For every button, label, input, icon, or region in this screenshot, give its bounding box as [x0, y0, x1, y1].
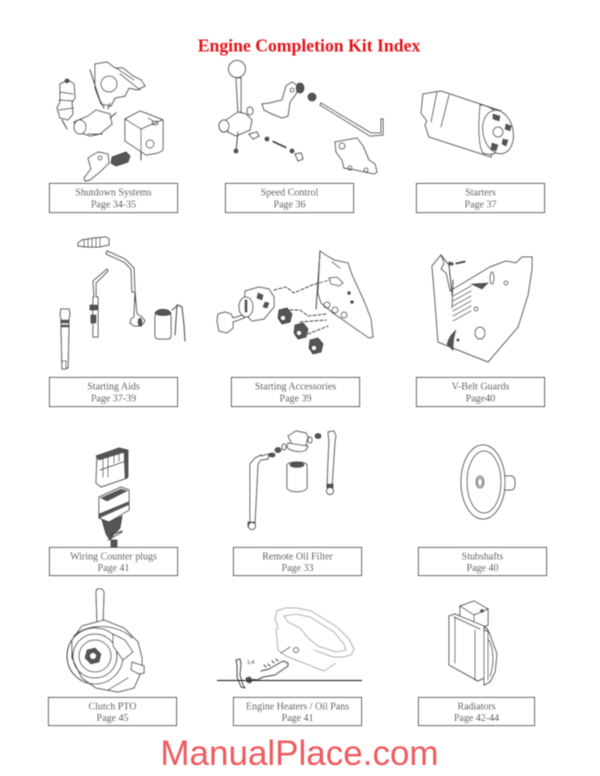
icon: oil pan and heater: 1-4 — [247, 660, 254, 666]
label box: Starters — [416, 184, 544, 212]
label box: Starting Accessories — [232, 378, 360, 406]
label box: Stubshafts: Stubshafts — [462, 552, 503, 562]
icon: starter motor — [421, 91, 517, 157]
label box: Speed Control — [226, 184, 354, 212]
label box: Starting Accessories: Starting Accessories — [255, 382, 336, 392]
title: Engine Completion Kit Index — [198, 36, 420, 56]
label box: Engine Heaters / Oil Pans — [234, 698, 362, 726]
label box: Starting Accessories: Page 39 — [280, 394, 311, 404]
label box: Remote Oil Filter: Remote Oil Filter — [262, 552, 333, 562]
label box: V-Belt Guards — [416, 378, 544, 406]
label box: Starting Aids: Starting Aids — [87, 382, 140, 392]
label box: Starting Aids: Page 37-39 — [91, 394, 136, 404]
label box: Starters: Starters — [465, 188, 496, 198]
watermark: ManualPlace.com — [160, 734, 439, 773]
label box: Shutdown Systems: Page 34-35 — [91, 200, 136, 210]
label box: Engine Heaters / Oil Pans: Page 41 — [282, 713, 313, 724]
label box: Engine Heaters / Oil Pans: Engine Heaters / Oil Pans — [246, 702, 349, 712]
icon: shutdown systems parts — [57, 62, 163, 181]
label box: Speed Control: Page 36 — [274, 200, 305, 210]
icon: clutch pto — [67, 589, 144, 692]
icon: wiring plugs — [96, 448, 129, 553]
rule under oil pan — [217, 680, 362, 682]
panel: shutdown systems — [48, 60, 546, 726]
label box: Clutch PTO: Page 45 — [97, 713, 128, 724]
icon: glow plugs and starting aid — [60, 237, 185, 369]
icon: speed control lever and linkage — [219, 60, 383, 174]
label box: Starting Aids — [50, 378, 178, 406]
label box: V-Belt Guards: V-Belt Guards — [452, 382, 509, 392]
icon: belt guard plate — [432, 255, 532, 362]
icon: stubshaft disc — [461, 445, 515, 519]
label box: Radiators: Page 42-44 — [454, 713, 499, 724]
icon: oil pan and heater — [236, 608, 354, 688]
label box: Wiring Counter plugs: Wiring Counter plugs — [70, 552, 157, 562]
label box: Remote Oil Filter — [234, 548, 362, 576]
label box: Radiators: Radiators — [457, 702, 496, 712]
label box: Remote Oil Filter: Page 33 — [282, 563, 313, 574]
label box: Shutdown Systems — [50, 184, 178, 212]
label box: Starters: Page 37 — [465, 200, 496, 210]
label box: V-Belt Guards: Page40 — [466, 394, 495, 404]
label box: Stubshafts — [418, 548, 546, 576]
label box: Speed Control: Speed Control — [261, 188, 318, 198]
icon: oil filter with hoses — [248, 431, 336, 530]
label box: Radiators — [418, 698, 534, 726]
label box: Wiring Counter plugs — [50, 548, 178, 576]
label box: Clutch PTO — [48, 698, 176, 726]
label box: Wiring Counter plugs: Page 41 — [98, 563, 129, 574]
icon: key switch and panel — [217, 251, 373, 354]
label box: Stubshafts: Page 40 — [467, 563, 498, 574]
label box: Shutdown Systems: Shutdown Systems — [75, 188, 152, 198]
label box: Clutch PTO: Clutch PTO — [89, 702, 136, 712]
icon: radiator — [449, 601, 497, 685]
